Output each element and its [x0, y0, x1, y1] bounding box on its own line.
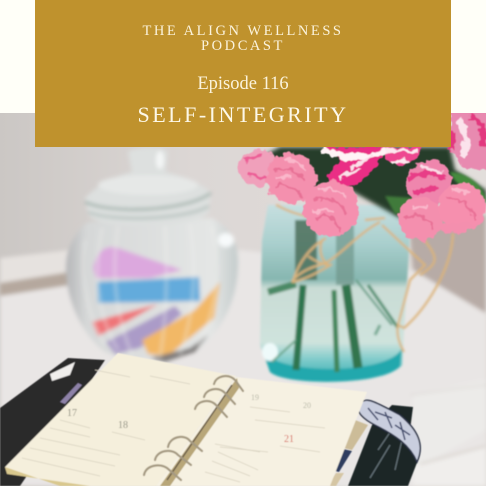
- raffia bow: [276, 205, 453, 352]
- glass jar: [66, 148, 238, 362]
- planner dates: [67, 393, 311, 445]
- flowers: [239, 108, 486, 241]
- planner lines: [22, 370, 325, 482]
- planner dates: 19: [251, 393, 259, 402]
- episode title: SELF-INTEGRITY: [138, 102, 348, 127]
- chalk: purple: [106, 306, 182, 354]
- binder rings: [144, 376, 243, 480]
- planner: [0, 353, 420, 486]
- photo wall: [0, 113, 486, 486]
- spine: [160, 378, 239, 486]
- planner dates: 21: [284, 434, 294, 445]
- planner dates: 20: [303, 401, 311, 410]
- table surface: [0, 215, 486, 486]
- top cream strip: [0, 0, 486, 113]
- stems: [268, 220, 398, 372]
- left page: [5, 353, 236, 486]
- planner dates: 17: [67, 408, 77, 419]
- planner dates: 18: [118, 420, 128, 431]
- podcast name heading: [142, 23, 344, 54]
- jar ribs: [83, 224, 217, 358]
- chalk: red: [92, 304, 158, 336]
- chalk: blue: [97, 277, 200, 303]
- planner cover: [0, 358, 105, 486]
- chalk: orange: [142, 282, 220, 356]
- leather strap: [348, 405, 418, 486]
- jar body: [66, 218, 238, 359]
- patterned strap: [358, 400, 420, 462]
- episode number: Episode 116: [197, 74, 289, 94]
- petal shading: [276, 168, 475, 232]
- gold title banner: [35, 0, 451, 147]
- chalk: pink: [93, 247, 182, 278]
- tabs: [343, 420, 368, 450]
- background photo: desk with jar, flowers and planner: [0, 113, 486, 486]
- pink carnation blooms: [239, 149, 277, 187]
- right page: [156, 377, 367, 486]
- vase glass: [260, 205, 410, 381]
- flower vase: [260, 205, 453, 382]
- jar lid: [85, 148, 211, 225]
- podcast name heading: THE ALIGN WELLNESS: [142, 23, 344, 39]
- podcast name heading: PODCAST: [201, 38, 285, 54]
